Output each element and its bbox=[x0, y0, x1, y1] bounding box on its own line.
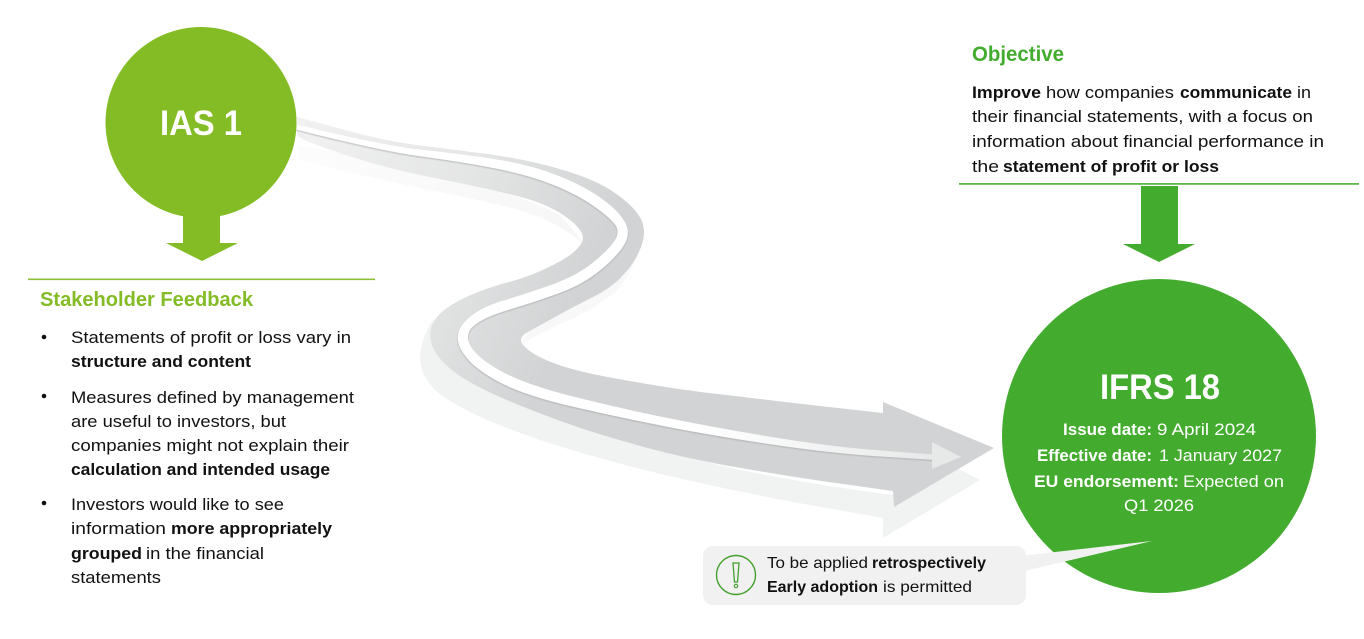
bullet 2: Measures defined by management bbox=[71, 388, 354, 407]
circle: IFRS 18 bbox=[1002, 279, 1316, 593]
issue date: 9 April 2024 bbox=[1157, 420, 1256, 439]
text block: stakeholder feedback bullets bbox=[42, 328, 354, 587]
EU endorsement: Expected on bbox=[1183, 472, 1284, 491]
arrow: IAS 1 down to feedback bbox=[166, 212, 238, 261]
effective date: Effective date: bbox=[1037, 446, 1152, 465]
bullet 3: grouped bbox=[71, 544, 142, 563]
text block: objective: the bbox=[972, 157, 999, 176]
EU endorsement: EU endorsement: bbox=[1034, 472, 1179, 491]
EU endorsement: Q1 2026 bbox=[1124, 496, 1194, 515]
callout: retrospective application: To be applied bbox=[767, 555, 868, 572]
bullet 3: statements bbox=[71, 568, 161, 587]
bullet 2: are useful to investors, but bbox=[71, 412, 286, 431]
EU endorsement bbox=[1034, 472, 1284, 515]
text block: objective bbox=[972, 83, 1324, 176]
arrow: objective down to IFRS 18 bbox=[1123, 186, 1195, 262]
icon: exclamation in circle bbox=[716, 556, 756, 594]
text block: objective: statement of profit or loss bbox=[1003, 157, 1219, 176]
issue date bbox=[1063, 420, 1256, 439]
circle: IFRS 18: IFRS 18 bbox=[1100, 368, 1220, 407]
winding road arrow bbox=[296, 117, 994, 538]
callout: retrospective application: retrospectively bbox=[872, 555, 986, 572]
bullet 1 bbox=[42, 328, 351, 371]
bullet 3: more appropriately bbox=[171, 519, 333, 538]
text block: objective: their financial statements, with a focus on bbox=[972, 107, 1313, 126]
text block: objective: in bbox=[1297, 83, 1311, 102]
divider: stakeholder feedback bbox=[28, 278, 375, 280]
bullet 1: Statements of profit or loss vary in bbox=[71, 328, 351, 347]
callout: retrospective application: is permitted bbox=[883, 579, 972, 596]
bullet 1: structure and content bbox=[71, 352, 251, 371]
heading: Stakeholder Feedback: Stakeholder Feedback bbox=[40, 289, 254, 311]
text block: objective: information about financial performance in bbox=[972, 132, 1324, 151]
text block: objective: Improve bbox=[972, 83, 1041, 102]
effective date bbox=[1037, 446, 1282, 465]
callout: retrospective application: Early adoption bbox=[767, 579, 878, 596]
text block: objective: how companies bbox=[1046, 83, 1174, 102]
bullet 2: companies might not explain their bbox=[71, 436, 349, 455]
bullet 3: Investors would like to see bbox=[71, 495, 284, 514]
bullet 3 bbox=[42, 495, 333, 587]
bullet 2 bbox=[42, 388, 354, 479]
text block: objective: communicate bbox=[1180, 83, 1292, 102]
heading: Objective: Objective bbox=[972, 43, 1064, 66]
circle: IAS 1 bbox=[106, 27, 296, 218]
callout: retrospective application bbox=[703, 541, 1152, 605]
effective date: 1 January 2027 bbox=[1159, 446, 1282, 465]
divider: objective bbox=[959, 183, 1359, 185]
circle: IAS 1: IAS 1 bbox=[160, 104, 242, 143]
bullet 2: calculation and intended usage bbox=[71, 460, 330, 479]
issue date: Issue date: bbox=[1063, 420, 1152, 439]
bullet 3: information bbox=[71, 519, 166, 538]
bullet 3: in the financial bbox=[146, 544, 264, 563]
